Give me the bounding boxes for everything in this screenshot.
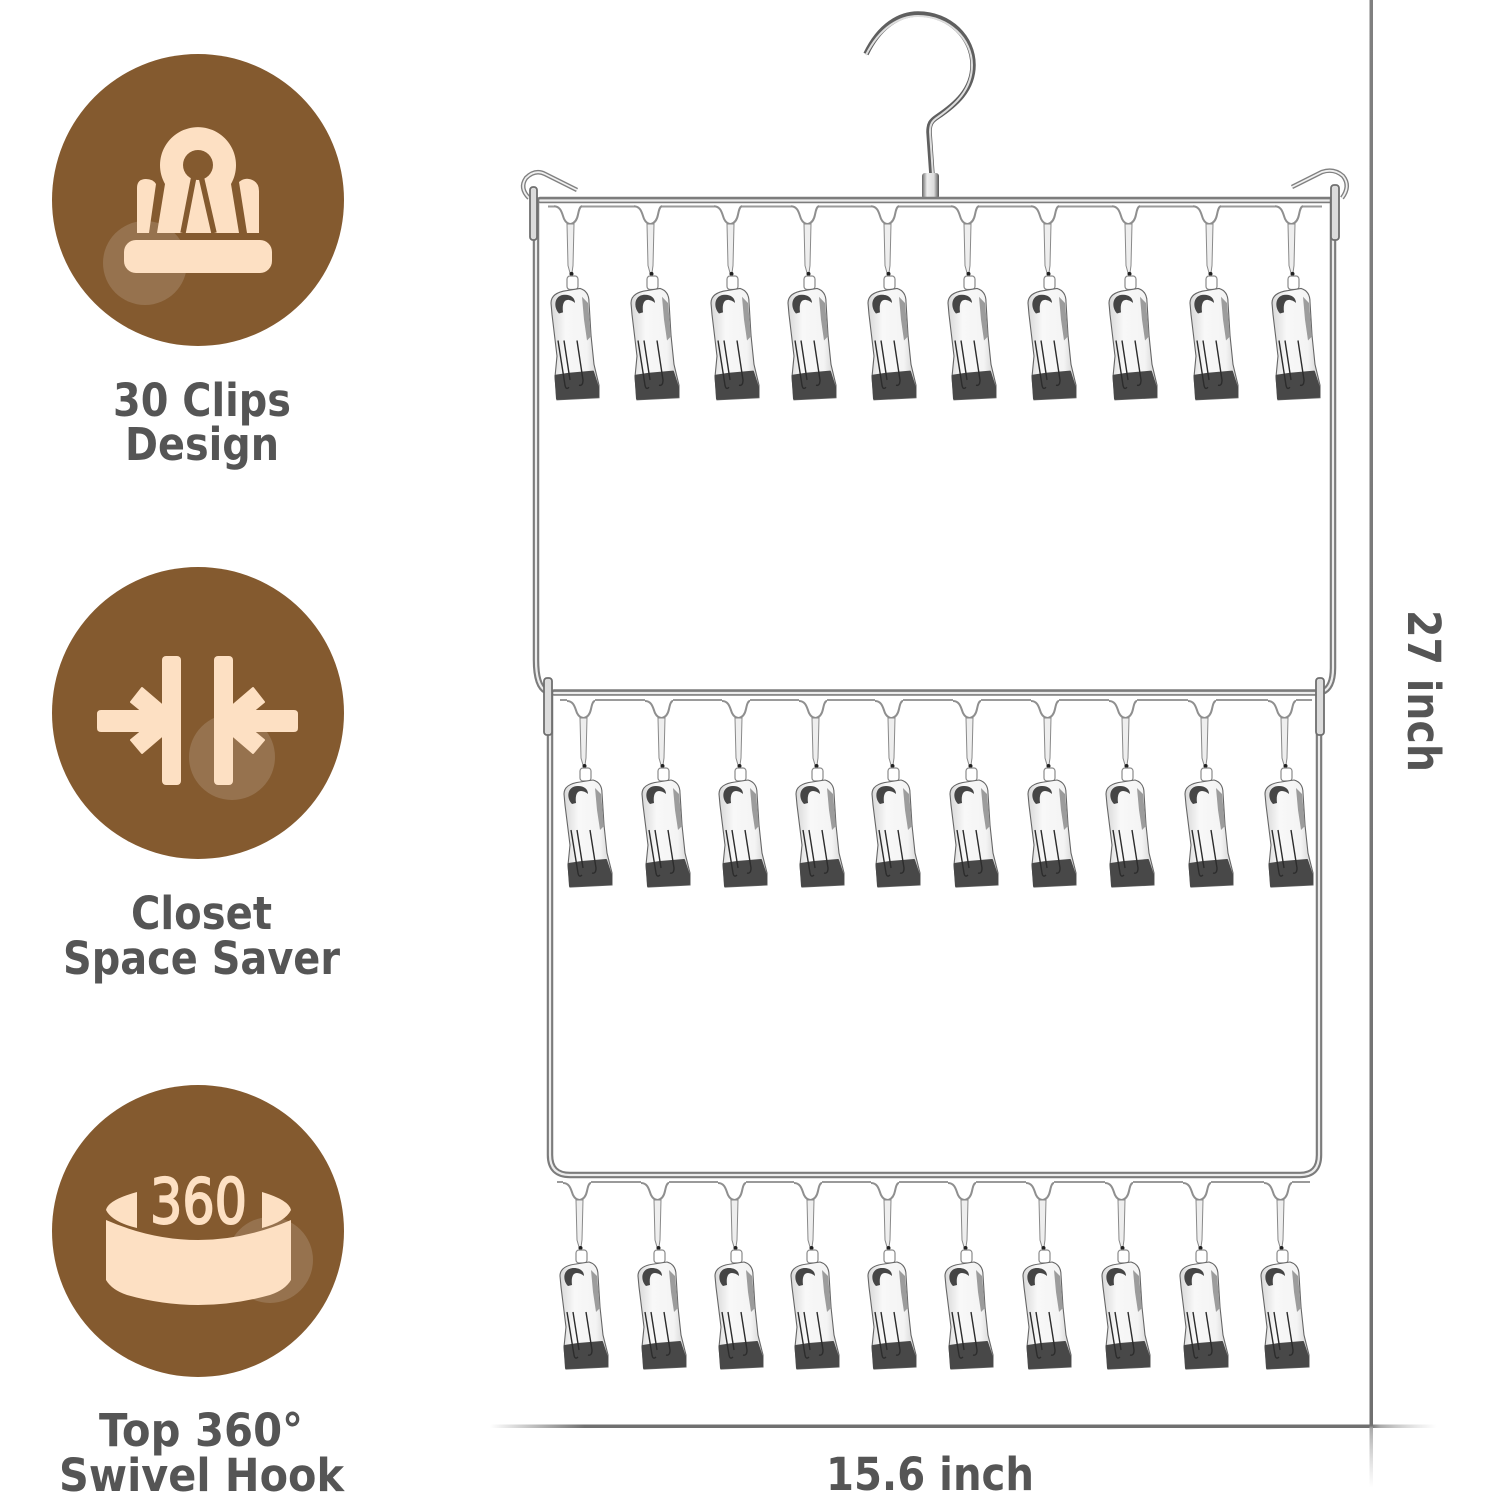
- panel: dimension lines: [490, 0, 1437, 1488]
- heading: Closet Space Saver: Closet: [131, 887, 272, 940]
- icon: 360 swivel badge: [52, 1085, 344, 1377]
- clip row: middle: [560, 700, 1313, 887]
- panel: feature icons: [52, 54, 345, 1495]
- heading: 30 Clips Design: Design: [125, 418, 279, 471]
- icon: binder clip badge: [52, 54, 344, 346]
- heading: 30 Clips Design: 30 Clips: [113, 374, 291, 427]
- icon: 360 swivel badge: 360: [150, 1165, 247, 1238]
- clip row: bottom: [557, 1182, 1310, 1369]
- end hook: left: [523, 172, 577, 198]
- heading: Closet Space Saver: Space Saver: [63, 932, 341, 985]
- hook: swivel hook: [866, 14, 973, 199]
- icon: space saver badge: [52, 567, 344, 859]
- hanger frame: [523, 14, 1347, 1175]
- end hook: right: [1292, 171, 1347, 198]
- frame wire: top tier: [530, 185, 1339, 692]
- clip row: top: [548, 206, 1322, 400]
- frame wire: lower tier: [544, 678, 1324, 1175]
- label: height dimension: 27 inch: [1397, 610, 1450, 772]
- heading: Top 360 Swivel Hook: Top 360°: [99, 1404, 303, 1457]
